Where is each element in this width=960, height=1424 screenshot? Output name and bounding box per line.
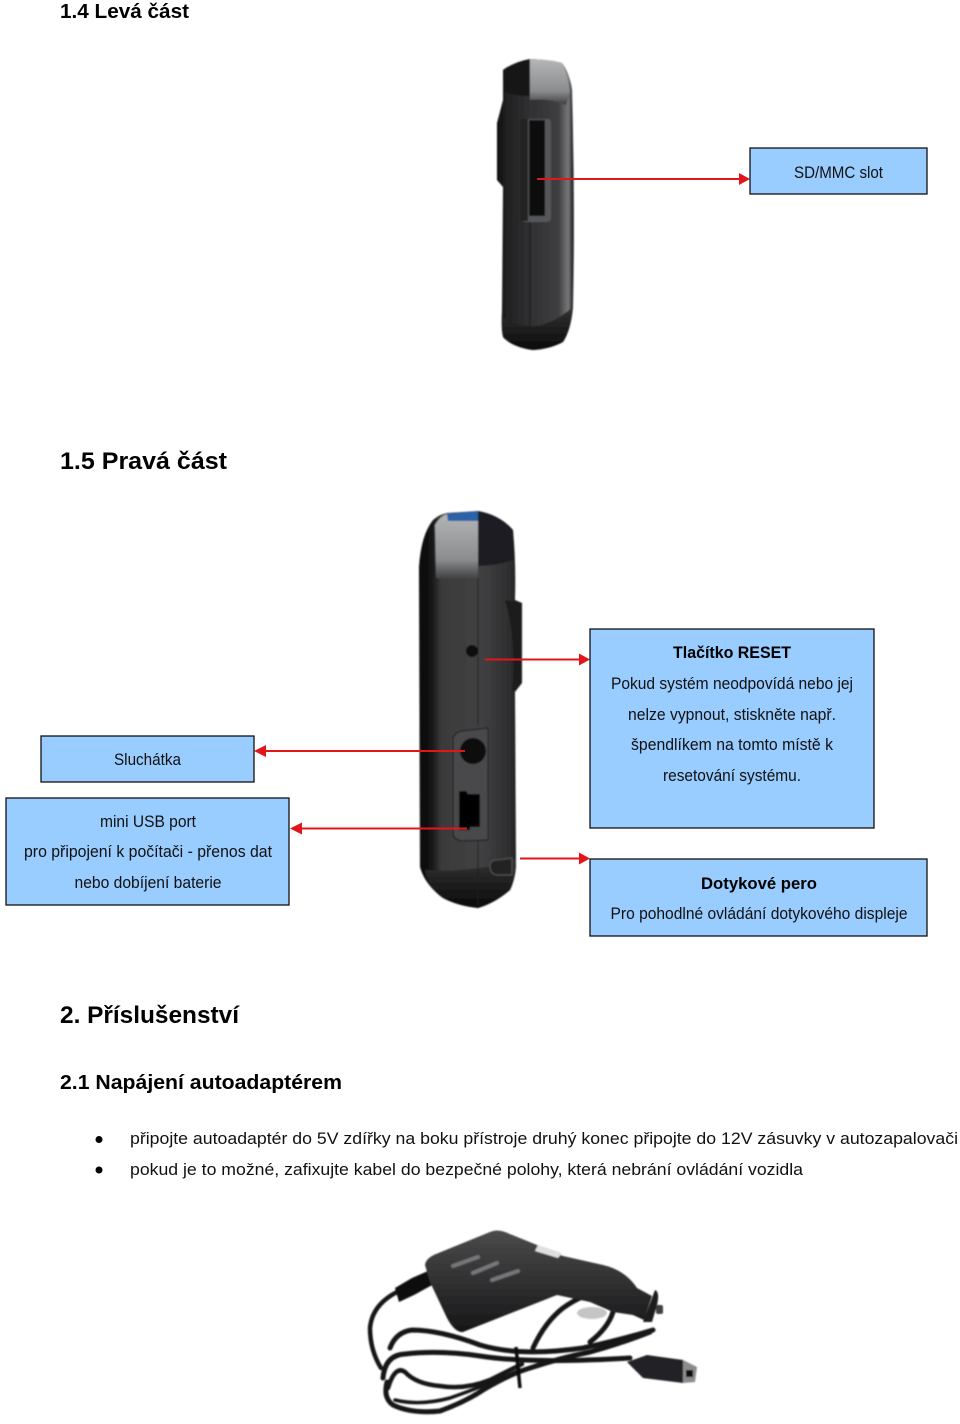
device photo: right side bbox=[419, 511, 522, 908]
callout: Tlačítko RESET: Tlačítko RESET bbox=[673, 644, 791, 662]
arrow: Dotykové pero bbox=[520, 852, 590, 864]
callout: mini USB port bbox=[6, 798, 289, 905]
callout: Tlačítko RESET: nelze vypnout, stiskněte např. bbox=[628, 706, 836, 724]
adapter body bbox=[425, 1230, 652, 1332]
car adapter photo bbox=[370, 1230, 697, 1412]
arrow: Sluchátka bbox=[254, 745, 465, 757]
callout: Dotykové pero bbox=[590, 859, 927, 936]
heading 1.4: 1.4 Levá část bbox=[60, 0, 189, 23]
arrow: RESET bbox=[485, 654, 590, 666]
callout: Sluchátka bbox=[41, 736, 254, 782]
callout: SD/MMC slot bbox=[750, 148, 927, 194]
mini USB plug bbox=[627, 1355, 683, 1383]
callout: Dotykové pero: Pro pohodlné ovládání dotykového displeje bbox=[610, 905, 908, 923]
heading 1.5: 1.5 Pravá část bbox=[60, 448, 227, 475]
callout: Sluchátka: Sluchátka bbox=[114, 751, 182, 769]
callout: SD/MMC slot: SD/MMC slot bbox=[794, 164, 883, 182]
callout: Tlačítko RESET: Pokud systém neodpovídá nebo jej bbox=[611, 675, 853, 693]
callout: mini USB port: nebo dobíjení baterie bbox=[74, 874, 222, 892]
heading 2.1: 2.1 Napájení autoadaptérem bbox=[60, 1071, 342, 1094]
reset hole bbox=[466, 645, 478, 657]
bullet list: pokud je to možné, zafixujte kabel do bezpečné polohy, která nebrání ovládání vozidla bbox=[130, 1161, 804, 1179]
heading 2: 2. Příslušenství bbox=[60, 1002, 240, 1029]
callout: mini USB port: mini USB port bbox=[100, 813, 196, 831]
device photo: left side bbox=[497, 59, 574, 350]
cable loops bbox=[370, 1292, 653, 1412]
arrow: mini USB port bbox=[290, 822, 467, 834]
bullet list bbox=[96, 1130, 958, 1179]
callout: mini USB port: pro připojení k počítači - přenos dat bbox=[24, 843, 272, 861]
callout: Tlačítko RESET: špendlíkem na tomto místě k bbox=[631, 736, 834, 754]
callout: Dotykové pero: Dotykové pero bbox=[701, 875, 817, 893]
callout: Tlačítko RESET bbox=[590, 629, 874, 828]
bullet list: připojte autoadaptér do 5V zdířky na boku přístroje druhý konec připojte do 12V zásuvky v autozapalovači bbox=[130, 1130, 958, 1148]
tip bbox=[643, 1290, 658, 1322]
strain relief bbox=[395, 1271, 434, 1302]
stylus bbox=[490, 858, 512, 875]
port recess bbox=[453, 728, 488, 841]
arrow: SD/MMC slot bbox=[537, 173, 750, 185]
callout: Tlačítko RESET: resetování systému. bbox=[663, 767, 801, 785]
